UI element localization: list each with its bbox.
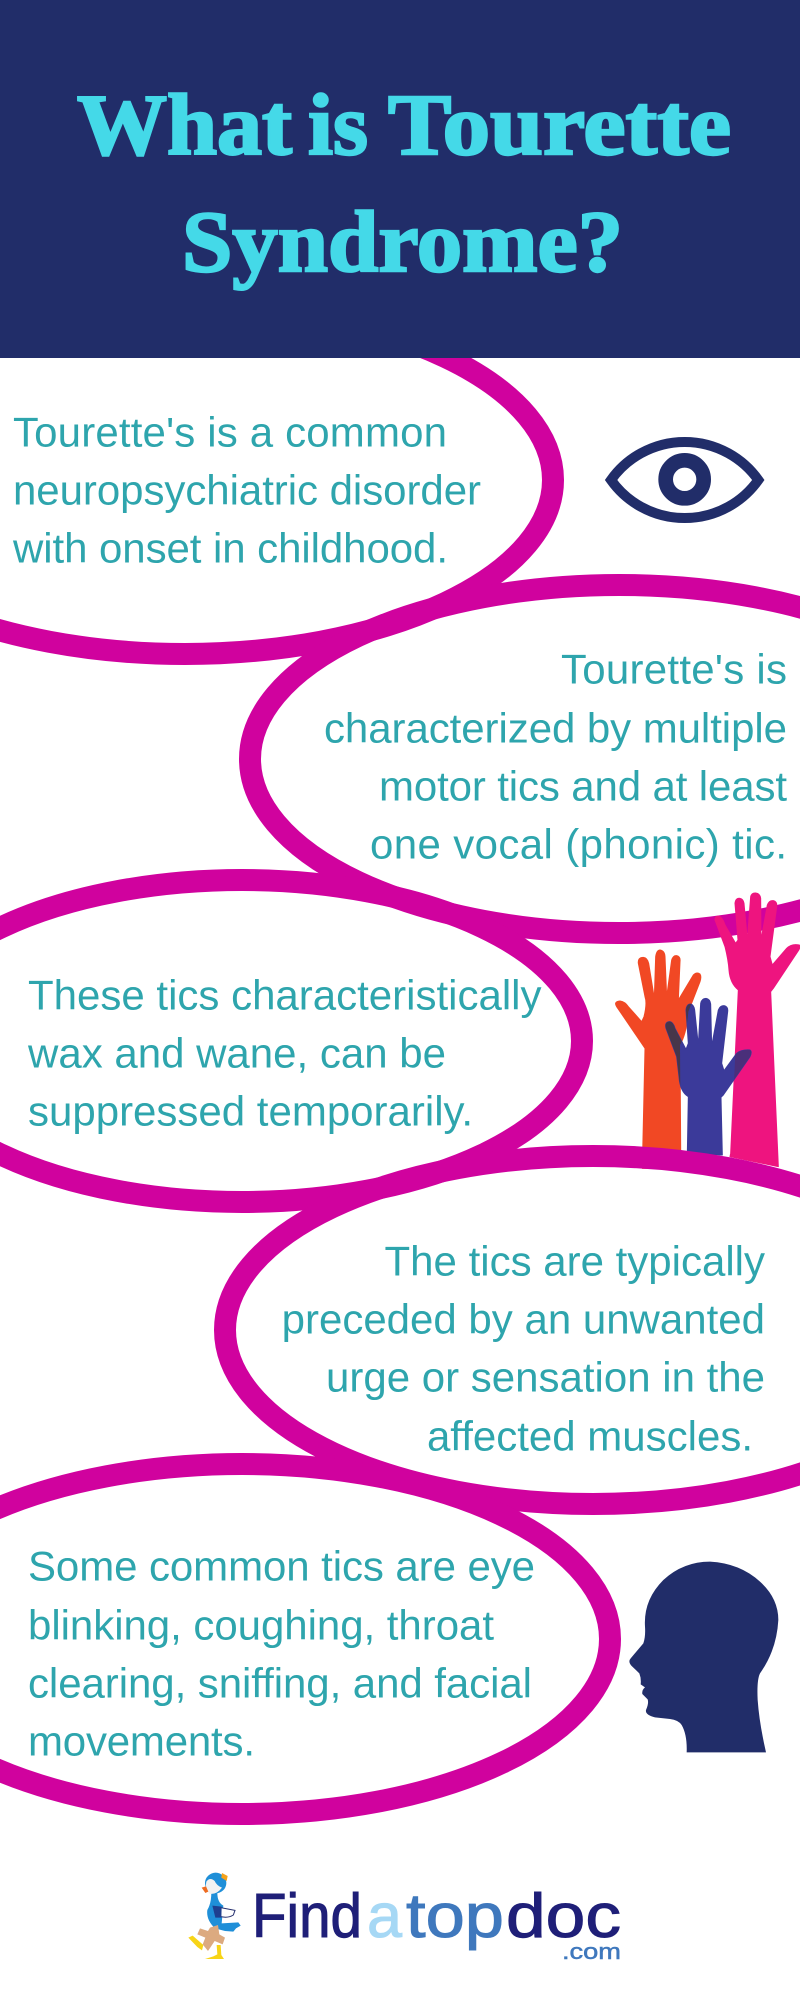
logo: Findatopdoc: top <box>406 1882 504 1951</box>
panel: onset in childhood: neuropsychiatric disorder <box>13 466 481 514</box>
panel: wax and wane <box>0 880 582 1202</box>
panel: common tics: Some common tics are eye <box>28 1542 535 1590</box>
logo: Findatopdoc <box>188 1873 621 1964</box>
panel: preceded by urge: The tics are typically <box>385 1238 765 1284</box>
panel: preceded by urge <box>225 1156 800 1504</box>
logo: Findatopdoc: doc <box>506 1882 621 1951</box>
header banner <box>0 0 800 358</box>
panel: common tics: blinking, coughing, throat <box>28 1602 494 1648</box>
panel: common tics: clearing, sniffing, and facial <box>28 1660 532 1706</box>
panel: wax and wane: wax and wane, can be <box>27 1030 446 1076</box>
panel: motor and vocal tics: Tourette's is <box>561 646 787 692</box>
logo: Findatopdoc: Find <box>252 1882 362 1951</box>
panel: common tics: movements. <box>28 1718 255 1764</box>
panel: onset in childhood: with onset in childhood. <box>12 524 448 572</box>
logo: Findatopdoc: .com <box>562 1939 621 1964</box>
panel: preceded by urge: urge or sensation in the <box>326 1354 765 1400</box>
logo: Findatopdoc: a <box>367 1882 403 1951</box>
panel: motor and vocal tics: characterized by multiple <box>324 704 787 752</box>
icon: duck mascot <box>188 1873 241 1959</box>
title: Tourette <box>388 76 731 173</box>
icon: head silhouette <box>629 1562 778 1752</box>
title <box>77 76 731 290</box>
panel: motor and vocal tics: motor tics and at least <box>379 762 787 810</box>
title: What <box>77 76 292 173</box>
panel: motor and vocal tics <box>250 585 800 933</box>
panel: wax and wane: These tics characteristically <box>28 972 542 1018</box>
icon: eye <box>611 442 758 518</box>
title: Syndrome? <box>182 193 623 290</box>
panel: onset in childhood: Tourette's is a common <box>13 408 447 456</box>
panel: onset in childhood <box>0 306 553 654</box>
panel: common tics <box>0 1464 610 1814</box>
icon: raised hands <box>616 893 800 1168</box>
title: is <box>308 76 368 173</box>
panel: motor and vocal tics: one vocal (phonic) tic. <box>370 820 787 868</box>
panel: preceded by urge: affected muscles. <box>427 1412 753 1460</box>
panel: wax and wane: suppressed temporarily. <box>28 1088 473 1134</box>
panel: preceded by urge: preceded by an unwanted <box>282 1296 765 1342</box>
